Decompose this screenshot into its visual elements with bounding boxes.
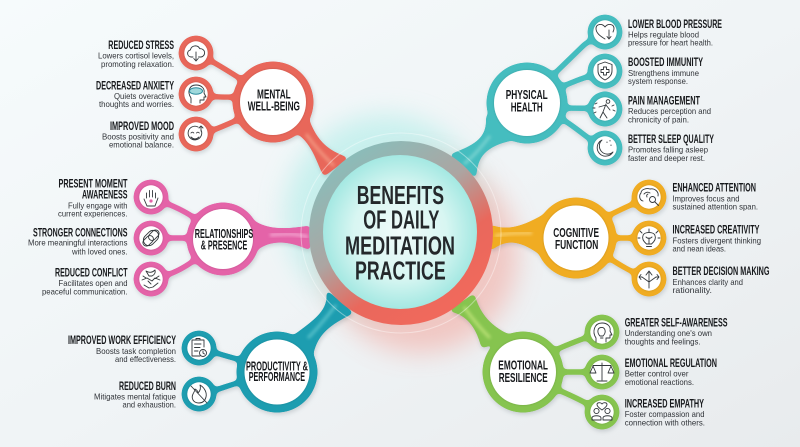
node: mental well-being bbox=[240, 69, 306, 135]
item: reduced burn bbox=[94, 380, 211, 410]
node: relationships and presence bbox=[193, 209, 253, 269]
node: physical health: PHYSICAL bbox=[506, 88, 548, 102]
connectors and rings: physical health bbox=[450, 15, 622, 178]
item: improved work efficiency bbox=[68, 334, 211, 364]
item: boosted immunity: system response. bbox=[628, 77, 688, 86]
stem highlight bbox=[270, 234, 308, 237]
item: boosted immunity: Strengthens immune bbox=[628, 69, 699, 78]
item: decreased anxiety bbox=[96, 80, 208, 109]
center glow bbox=[285, 115, 518, 353]
item: better decision making bbox=[637, 265, 770, 295]
item: increased creativity: Fosters divergent thinking bbox=[672, 236, 761, 245]
item: greater self-awareness bbox=[590, 316, 728, 346]
item: increased creativity: and nean ideas. bbox=[672, 244, 726, 253]
node: productivity and performance: PRODUCTIVITY & bbox=[246, 360, 308, 374]
item: improved mood: IMPROVED MOOD bbox=[110, 120, 174, 133]
item: present moment awareness: current experiences. bbox=[58, 210, 128, 219]
item: enhanced attention bbox=[637, 182, 758, 212]
node: mental well-being: MENTAL bbox=[257, 88, 291, 102]
item: better decision making: Enhances clarity and bbox=[672, 278, 743, 287]
item: reduced conflict: Facilitates open and bbox=[58, 279, 128, 288]
branch: cognitive function bbox=[490, 180, 770, 296]
item: increased empathy: connection with others. bbox=[625, 418, 705, 427]
item: emotional regulation bbox=[590, 357, 717, 387]
item: present moment awareness: AWARENESS bbox=[82, 189, 128, 202]
node: emotional resilience: RESILIENCE bbox=[499, 371, 548, 385]
connectors and rings: mental well-being bbox=[179, 36, 348, 176]
item: decreased anxiety: DECREASED ANXIETY bbox=[96, 80, 174, 92]
item: reduced conflict: REDUCED CONFLICT bbox=[55, 267, 128, 280]
item: improved work efficiency: IMPROVED WORK EFFICIENCY bbox=[68, 334, 176, 347]
connectors and rings: relationships and presence bbox=[134, 180, 310, 296]
branch: physical health bbox=[450, 15, 722, 178]
stem highlight bbox=[308, 305, 336, 338]
item: better sleep quality: BETTER SLEEP QUALITY bbox=[628, 133, 714, 146]
item: increased creativity bbox=[637, 223, 761, 253]
node: cognitive function: FUNCTION bbox=[555, 238, 598, 252]
item: greater self-awareness: thoughts and feelings. bbox=[625, 337, 700, 346]
item: decreased anxiety: thoughts and worries. bbox=[99, 100, 174, 109]
item: stronger connections: STRONGER CONNECTIONS bbox=[33, 226, 128, 239]
item: increased empathy bbox=[590, 397, 705, 427]
node: physical health: HEALTH bbox=[511, 101, 543, 115]
connectors and rings: productivity and performance bbox=[182, 290, 353, 412]
node: relationships and presence: & PRESENCE bbox=[201, 238, 247, 252]
item: boosted immunity bbox=[593, 56, 703, 86]
item: pain management bbox=[593, 95, 711, 124]
item: reduced burn: REDUCED BURN bbox=[119, 380, 176, 393]
item: present moment awareness: Fully engage with bbox=[68, 201, 128, 210]
item: reduced burn: and exhaustion. bbox=[122, 401, 176, 410]
item: improved mood bbox=[102, 120, 208, 150]
item: emotional regulation: EMOTIONAL REGULATION bbox=[625, 357, 717, 370]
branch: emotional resilience bbox=[449, 294, 728, 429]
item: reduced stress bbox=[98, 39, 208, 69]
item: improved work efficiency: and effectiveness. bbox=[115, 355, 176, 364]
title: BENEFITS bbox=[357, 182, 444, 210]
item: better sleep quality bbox=[593, 133, 714, 163]
node: physical health bbox=[494, 70, 560, 136]
item: lower blood pressure: pressure for heart health. bbox=[628, 38, 713, 48]
item: reduced stress: REDUCED STRESS bbox=[108, 39, 174, 52]
node: emotional resilience bbox=[490, 339, 556, 405]
item: reduced conflict bbox=[42, 267, 163, 296]
stem highlight bbox=[464, 136, 490, 164]
item: improved work efficiency: Boosts task completion bbox=[96, 347, 176, 356]
item: decreased anxiety: Quiets overactive bbox=[114, 92, 174, 101]
stem highlight bbox=[464, 307, 490, 338]
title: OF DAILY bbox=[363, 206, 439, 234]
item: pain management: PAIN MANAGEMENT bbox=[628, 95, 700, 108]
item: pain management: Reduces perception and bbox=[628, 107, 711, 116]
item: better decision making: rationality. bbox=[672, 286, 712, 295]
item: better sleep quality: faster and deeper rest. bbox=[628, 154, 705, 163]
title bbox=[345, 182, 455, 285]
item: improved mood: Boosts positivity and bbox=[102, 132, 174, 142]
item: stronger connections: with loved ones. bbox=[71, 247, 128, 256]
item: reduced stress: Lowers cortisol levels, bbox=[98, 52, 174, 60]
stem highlight bbox=[495, 233, 532, 236]
item: boosted immunity: BOOSTED IMMUNITY bbox=[628, 56, 703, 69]
item: stronger connections: More meaningful interactions bbox=[28, 239, 128, 248]
branch: mental well-being bbox=[96, 36, 348, 176]
title: PRACTICE bbox=[355, 257, 446, 285]
item: better sleep quality: Promotes falling asleep bbox=[628, 146, 708, 154]
item: reduced stress: promoting relaxation. bbox=[101, 60, 174, 69]
item: enhanced attention: Improves focus and bbox=[672, 195, 740, 204]
center circle with title bbox=[301, 133, 501, 333]
item: emotional regulation: emotional reactions. bbox=[625, 378, 694, 387]
item: pain management: chronicity of pain. bbox=[628, 116, 689, 124]
connectors and rings: cognitive function bbox=[490, 180, 666, 296]
title: MEDITATION bbox=[345, 233, 455, 261]
node: cognitive function bbox=[544, 206, 608, 270]
item: present moment awareness bbox=[58, 178, 163, 219]
item: improved mood: emotional balance. bbox=[109, 140, 174, 150]
item: greater self-awareness: GREATER SELF-AWARENESS bbox=[625, 316, 728, 329]
connectors and rings: emotional resilience bbox=[449, 294, 619, 429]
node: productivity and performance: PERFORMANCE bbox=[249, 370, 305, 384]
branch: productivity and performance bbox=[68, 290, 353, 412]
node: emotional resilience: EMOTIONAL bbox=[498, 358, 548, 372]
item: reduced conflict: peaceful communication. bbox=[42, 287, 128, 296]
item: stronger connections bbox=[28, 226, 163, 256]
node: relationships and presence: RELATIONSHIPS bbox=[195, 227, 253, 241]
item: reduced burn: Mitigates mental fatique bbox=[94, 393, 176, 402]
item: lower blood pressure: Helps regulate blood bbox=[628, 30, 699, 40]
item: increased empathy: Foster compassion and bbox=[625, 410, 704, 419]
item: greater self-awareness: Understanding one's own bbox=[625, 329, 712, 338]
stem highlight bbox=[306, 134, 334, 166]
item: emotional regulation: Better control over bbox=[625, 370, 689, 379]
node: cognitive function: COGNITIVE bbox=[553, 226, 599, 240]
item: lower blood pressure: LOWER BLOOD PRESSURE bbox=[628, 18, 722, 31]
node: productivity and performance bbox=[244, 340, 310, 404]
branch: relationships and presence bbox=[28, 178, 310, 296]
node: mental well-being: WELL-BEING bbox=[248, 100, 300, 114]
item: increased empathy: INCREASED EMPATHY bbox=[625, 397, 704, 410]
item: lower blood pressure bbox=[593, 18, 722, 48]
item: present moment awareness: PRESENT MOMENT bbox=[58, 178, 128, 191]
item: enhanced attention: sustained attention span. bbox=[672, 203, 758, 212]
